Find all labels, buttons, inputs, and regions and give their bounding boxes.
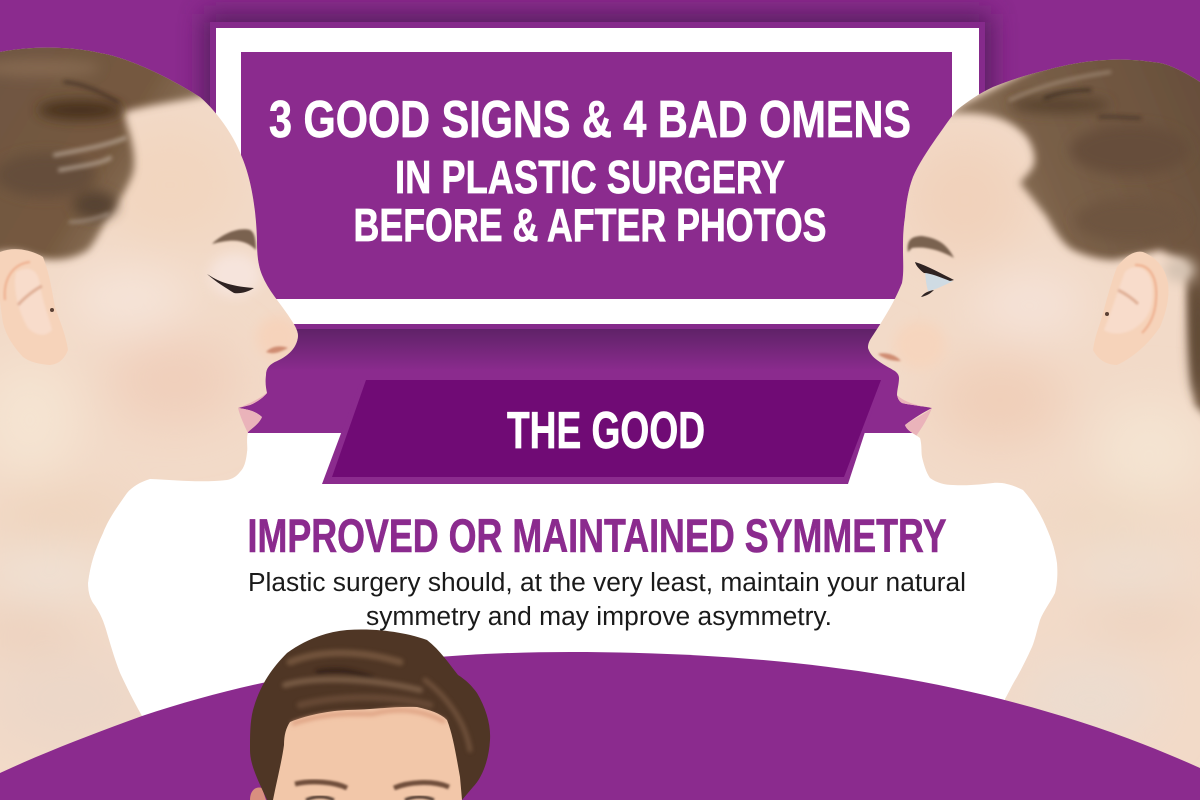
right skin	[860, 40, 1200, 800]
heading: improved or maintained symmetry: IMPROVED OR MAINTAINED SYMMETRY	[248, 509, 946, 562]
section banner: the good: THE GOOD	[507, 402, 705, 460]
man's eyebrows	[295, 782, 449, 788]
man's eyes	[306, 797, 434, 800]
left closed eye	[207, 274, 254, 293]
section banner: the good	[322, 380, 882, 484]
right ear	[1093, 252, 1168, 365]
right face profile	[860, 40, 1200, 800]
left eyebrow	[212, 229, 256, 250]
background: purple header	[0, 0, 1200, 433]
left ear	[0, 249, 68, 365]
body text: symmetry and may improve asymmetry.	[366, 603, 832, 631]
left lips	[238, 392, 268, 433]
left face profile	[0, 40, 310, 800]
left skin	[0, 40, 310, 800]
right eye	[915, 262, 954, 297]
right lips	[897, 395, 932, 436]
body text: Plastic surgery should, at the very least, maintain your natural	[248, 569, 966, 597]
man's forehead and face	[273, 707, 462, 800]
man's head photo	[245, 625, 495, 800]
title text	[270, 100, 910, 242]
panel: white content area	[0, 433, 1200, 800]
title text: 3 GOOD SIGNS & 4 BAD OMENS	[269, 91, 911, 149]
title card shadow	[191, 1, 1004, 106]
man's hairline shading	[292, 710, 445, 724]
man's hair	[245, 625, 495, 800]
man's ear	[250, 788, 266, 800]
left nostril	[266, 346, 288, 353]
title card	[210, 22, 985, 329]
right eyebrow	[908, 236, 954, 258]
left hair	[0, 40, 218, 260]
right hair	[945, 40, 1200, 420]
right nostril	[878, 353, 901, 361]
bottom purple arc	[0, 652, 1200, 800]
title text: BEFORE & AFTER PHOTOS	[354, 199, 826, 251]
body text	[248, 569, 966, 631]
band: shaded strip under title card	[273, 329, 880, 364]
title text: IN PLASTIC SURGERY	[395, 151, 785, 203]
